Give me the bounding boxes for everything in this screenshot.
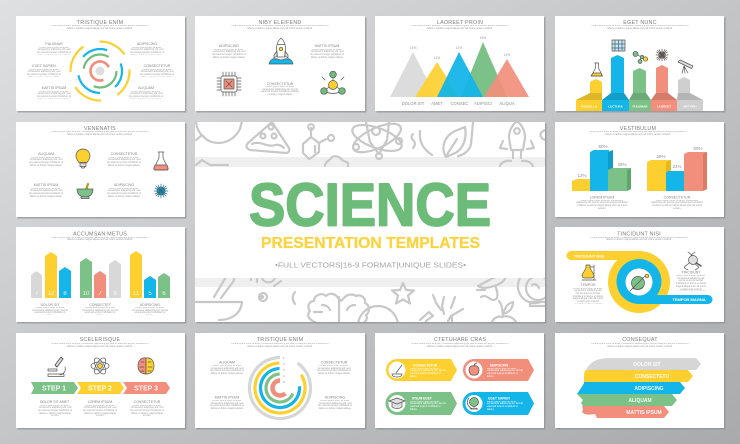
- heading: TRISTIQUE ENIM: [257, 337, 304, 343]
- chart labels: CONSEC: [451, 101, 468, 106]
- icon: earth: [630, 274, 649, 291]
- panel: niby eleifend: [195, 16, 366, 112]
- bar values: 5: [148, 291, 152, 297]
- chart labels: [402, 101, 515, 106]
- text block: aliquam: ALIQUAM: [38, 152, 54, 156]
- text block: pulvinar: PULVINAR: [45, 42, 63, 46]
- heading: NIBY ELEIFEND: [259, 20, 301, 26]
- panel: scelerisque steps: [16, 333, 186, 430]
- step arrows: STEP 3: [134, 386, 158, 392]
- step arrows: STEP 2: [88, 386, 112, 392]
- text block: aliquam: [129, 86, 163, 99]
- tagline: •FULL VECTORS|16-9 FORMAT|UNIQUE SLIDES•: [275, 262, 467, 270]
- bar values: 6: [162, 291, 166, 297]
- chart values: 13%: [410, 46, 416, 50]
- heading: EGET NUNC: [623, 20, 657, 26]
- text block: mattis ipsum: MATTIS IPSUM: [34, 183, 58, 187]
- ring numbers: 2: [283, 362, 285, 366]
- band labels: [574, 253, 706, 302]
- layer labels: ALIQUAM: [628, 398, 652, 404]
- text block: dolor sit: DOLOR SIT: [41, 303, 60, 307]
- card: ipsum eget: IPSUM EGET: [412, 396, 432, 400]
- bar values: 7: [35, 291, 39, 297]
- card: eget sapien: [462, 392, 534, 415]
- bar values: 12%: [577, 173, 587, 178]
- text block: adipiscing: [107, 183, 141, 198]
- heading: CONSEQUAT: [622, 337, 658, 343]
- icon: telescope: [678, 60, 693, 73]
- text block: aliquam: ALIQUAM: [219, 360, 235, 364]
- ring numbers: 3: [283, 368, 285, 372]
- card: adipiscing: [463, 359, 534, 381]
- text block: adipiscing: [131, 303, 169, 315]
- icon: lab stand: [582, 265, 596, 280]
- text block: mattis ipsum: MATTIS IPSUM: [42, 86, 66, 90]
- heading: CTETUHARE CRAS: [434, 337, 486, 343]
- chart: radial bars: [238, 346, 322, 430]
- text block: aliquam: [210, 360, 244, 376]
- icon: brain: [138, 358, 154, 374]
- text block: mattis ipsum: [29, 183, 63, 198]
- column labels: LAOREET: [657, 104, 671, 108]
- column labels: [581, 104, 697, 108]
- white title band: [195, 167, 545, 278]
- diagram: head profile layers: [577, 358, 701, 418]
- panel: venenatis: [16, 122, 186, 218]
- ring numbers: 1: [283, 356, 285, 360]
- text block: consectetur: CONSECTETUR: [267, 82, 294, 86]
- icon: light bulb: [76, 149, 90, 168]
- panel: eget nunc: [555, 16, 726, 112]
- chart: triangles: [390, 42, 529, 97]
- text block: adipiscing: ADIPISCING: [114, 183, 134, 187]
- icon: atom: [91, 356, 109, 376]
- icon: virus: [656, 49, 668, 61]
- icon: microscope: [48, 357, 65, 376]
- step arrows: STEP 1: [42, 386, 66, 392]
- chart: concentric rings: [69, 40, 131, 102]
- text block: consectetur: CONSECTETUR: [111, 152, 138, 156]
- text block: adipiscing: ADIPISCING: [137, 42, 157, 46]
- text block: mattis ipsum: [210, 396, 244, 411]
- text block: aliquam: [29, 152, 63, 168]
- chart values: 11%: [434, 56, 440, 60]
- text block: mattis ipsum: [37, 86, 71, 99]
- icon: molecule: [321, 71, 345, 94]
- icon: test tubes: [612, 40, 625, 51]
- text block: consectetur: [261, 82, 299, 97]
- text block: adipiscing: [130, 42, 164, 55]
- text block: adipiscing: ADIPISCING: [219, 44, 239, 48]
- text block: consectet: [81, 303, 119, 315]
- chart: group one: [572, 150, 631, 191]
- text block: dolor sit amet: DOLOR SIT AMET: [40, 400, 70, 404]
- text block: dolor sit: [31, 303, 69, 315]
- chart: arrow bars: [31, 251, 170, 298]
- text block: consectetur: CONSECTETUR: [144, 64, 171, 68]
- chart labels: ADIPISCI: [474, 101, 492, 106]
- panel: tincidunt nisi: [555, 227, 726, 324]
- panel: accumsan metus: [16, 227, 186, 324]
- text block: consectetur: [317, 360, 351, 376]
- chart labels: ALIQUA: [499, 101, 515, 106]
- chart values: 11%: [504, 53, 510, 57]
- band labels: TEMPOR MAGNA: [672, 297, 706, 302]
- column labels: PULVINAR: [632, 104, 648, 108]
- bar values: 60%: [598, 144, 608, 149]
- icon: flask: [591, 63, 602, 76]
- text block: mattis ipsum: MATTIS IPSUM: [215, 396, 239, 400]
- text block: mattis ipsum: [310, 44, 344, 60]
- bar values: 11: [133, 291, 140, 297]
- layer labels: CONSECTETU: [635, 374, 670, 380]
- bar values: 7: [98, 291, 102, 297]
- text block: consectetur: CONSECTETUR: [321, 360, 348, 364]
- heading: ACCUMSAN METUS: [73, 232, 127, 238]
- panel: vestibulum 3d bars: [555, 122, 726, 218]
- chart: group two: [647, 152, 707, 191]
- card: consectetur: [386, 359, 457, 381]
- chart labels: AMET: [431, 101, 443, 106]
- icon: rocket: [269, 38, 293, 64]
- heading: VESTIBULUM: [620, 126, 657, 132]
- text block: lorem ipsum: [576, 196, 628, 210]
- bar values: 28%: [617, 162, 627, 167]
- text block: consectetur: [651, 196, 703, 210]
- panel: consequat head: [555, 333, 726, 430]
- panel: laoreet proin triangles: [375, 16, 546, 112]
- bar values: [35, 291, 166, 297]
- bar values: 12: [48, 291, 55, 297]
- heading: SCELERISQUE: [80, 337, 120, 343]
- diagram: spiral bands: [566, 251, 712, 313]
- icon: microchip: [217, 72, 241, 96]
- step arrows: [31, 382, 170, 394]
- pattern: science doodles: [195, 122, 545, 322]
- text block: mattis ipsum: MATTIS IPSUM: [315, 44, 339, 48]
- card: eget sapien: EGET SAPIEN: [488, 396, 510, 400]
- ring numbers: 5: [283, 380, 285, 384]
- layer labels: ADIPISCING: [634, 386, 664, 392]
- bar values: 10: [83, 291, 90, 297]
- layer labels: [626, 362, 670, 416]
- bar values: [577, 144, 703, 178]
- text block: adipiscing: [318, 396, 352, 411]
- bar values: 9: [113, 291, 117, 297]
- text block: consectetur: [107, 152, 141, 168]
- bar values: 8: [63, 291, 67, 297]
- text block: adipiscing: ADIPISCING: [140, 303, 160, 307]
- card: adipiscing: ADIPISCING: [490, 364, 509, 368]
- text block: adipiscing: ADIPISCING: [325, 396, 345, 400]
- ring numbers: [283, 356, 285, 384]
- text block: consectet: CONSECTET: [89, 303, 112, 307]
- icon: mortar and pestle: [77, 184, 93, 198]
- band labels: TINCIDUNT NISI: [574, 253, 604, 258]
- text block: adipiscing: [212, 44, 246, 60]
- heading: TINCIDUNT NISI: [617, 232, 661, 238]
- heading: LAOREET PROIN: [437, 20, 483, 26]
- card: consectetur: CONSECTETUR: [413, 364, 438, 368]
- icon: bacteria: [154, 184, 168, 198]
- icon: dna magnifier: [684, 252, 701, 270]
- subtitle: presentation templates: PRESENTATION TEMPLATES: [261, 235, 480, 252]
- heading: TRISTIQUE ENIM: [77, 20, 124, 26]
- text block: consectetur: CONSECTETUR: [134, 400, 161, 404]
- column labels: MATTIPH: [683, 104, 697, 108]
- text block: tincidunt: TINCIDUNT: [682, 270, 701, 274]
- panel: ctetuhare cras: [375, 333, 546, 430]
- panel: tristique enim rings: [16, 16, 186, 112]
- chart labels: DOLOR SIT: [402, 101, 425, 106]
- panel: center cover: [195, 122, 546, 324]
- text block: consectetur: CONSECTETUR: [664, 196, 691, 200]
- card: ipsum eget: [386, 392, 457, 415]
- chart values: [410, 36, 510, 60]
- chart: arrow columns: [576, 55, 703, 111]
- title: SCIENCE: [249, 172, 491, 238]
- text block: lorem ipsum: LOREM IPSUM: [590, 196, 614, 200]
- icon: flask: [154, 152, 168, 170]
- text block: eget sapien: EGET SAPIEN: [32, 64, 56, 68]
- heading: VENENATIS: [84, 126, 116, 132]
- layer labels: DOLOR SIT: [633, 362, 661, 368]
- text block: eget sapien: [27, 64, 61, 77]
- text block: tempor: TEMPOR: [581, 283, 596, 287]
- chart values: 15%: [480, 36, 486, 40]
- column labels: PHASELLU: [581, 104, 597, 108]
- bar values: 50%: [693, 146, 703, 151]
- text block: aliquam: ALIQUAM: [138, 86, 154, 90]
- chart values: 12%: [456, 46, 462, 50]
- ring numbers: 4: [283, 374, 285, 378]
- column labels: LUCTURA: [608, 104, 624, 108]
- text block: lorem ipsum: LOREM IPSUM: [88, 400, 112, 404]
- layer labels: MATTIS IPSUM: [626, 410, 662, 416]
- bar values: 22%: [672, 164, 682, 169]
- text block: consectetur: [140, 64, 174, 77]
- panel: tristique enim radial chart: [195, 333, 366, 430]
- text block: pulvinar: [37, 42, 71, 55]
- icon: compound: [633, 52, 648, 64]
- bar values: 28%: [656, 154, 666, 159]
